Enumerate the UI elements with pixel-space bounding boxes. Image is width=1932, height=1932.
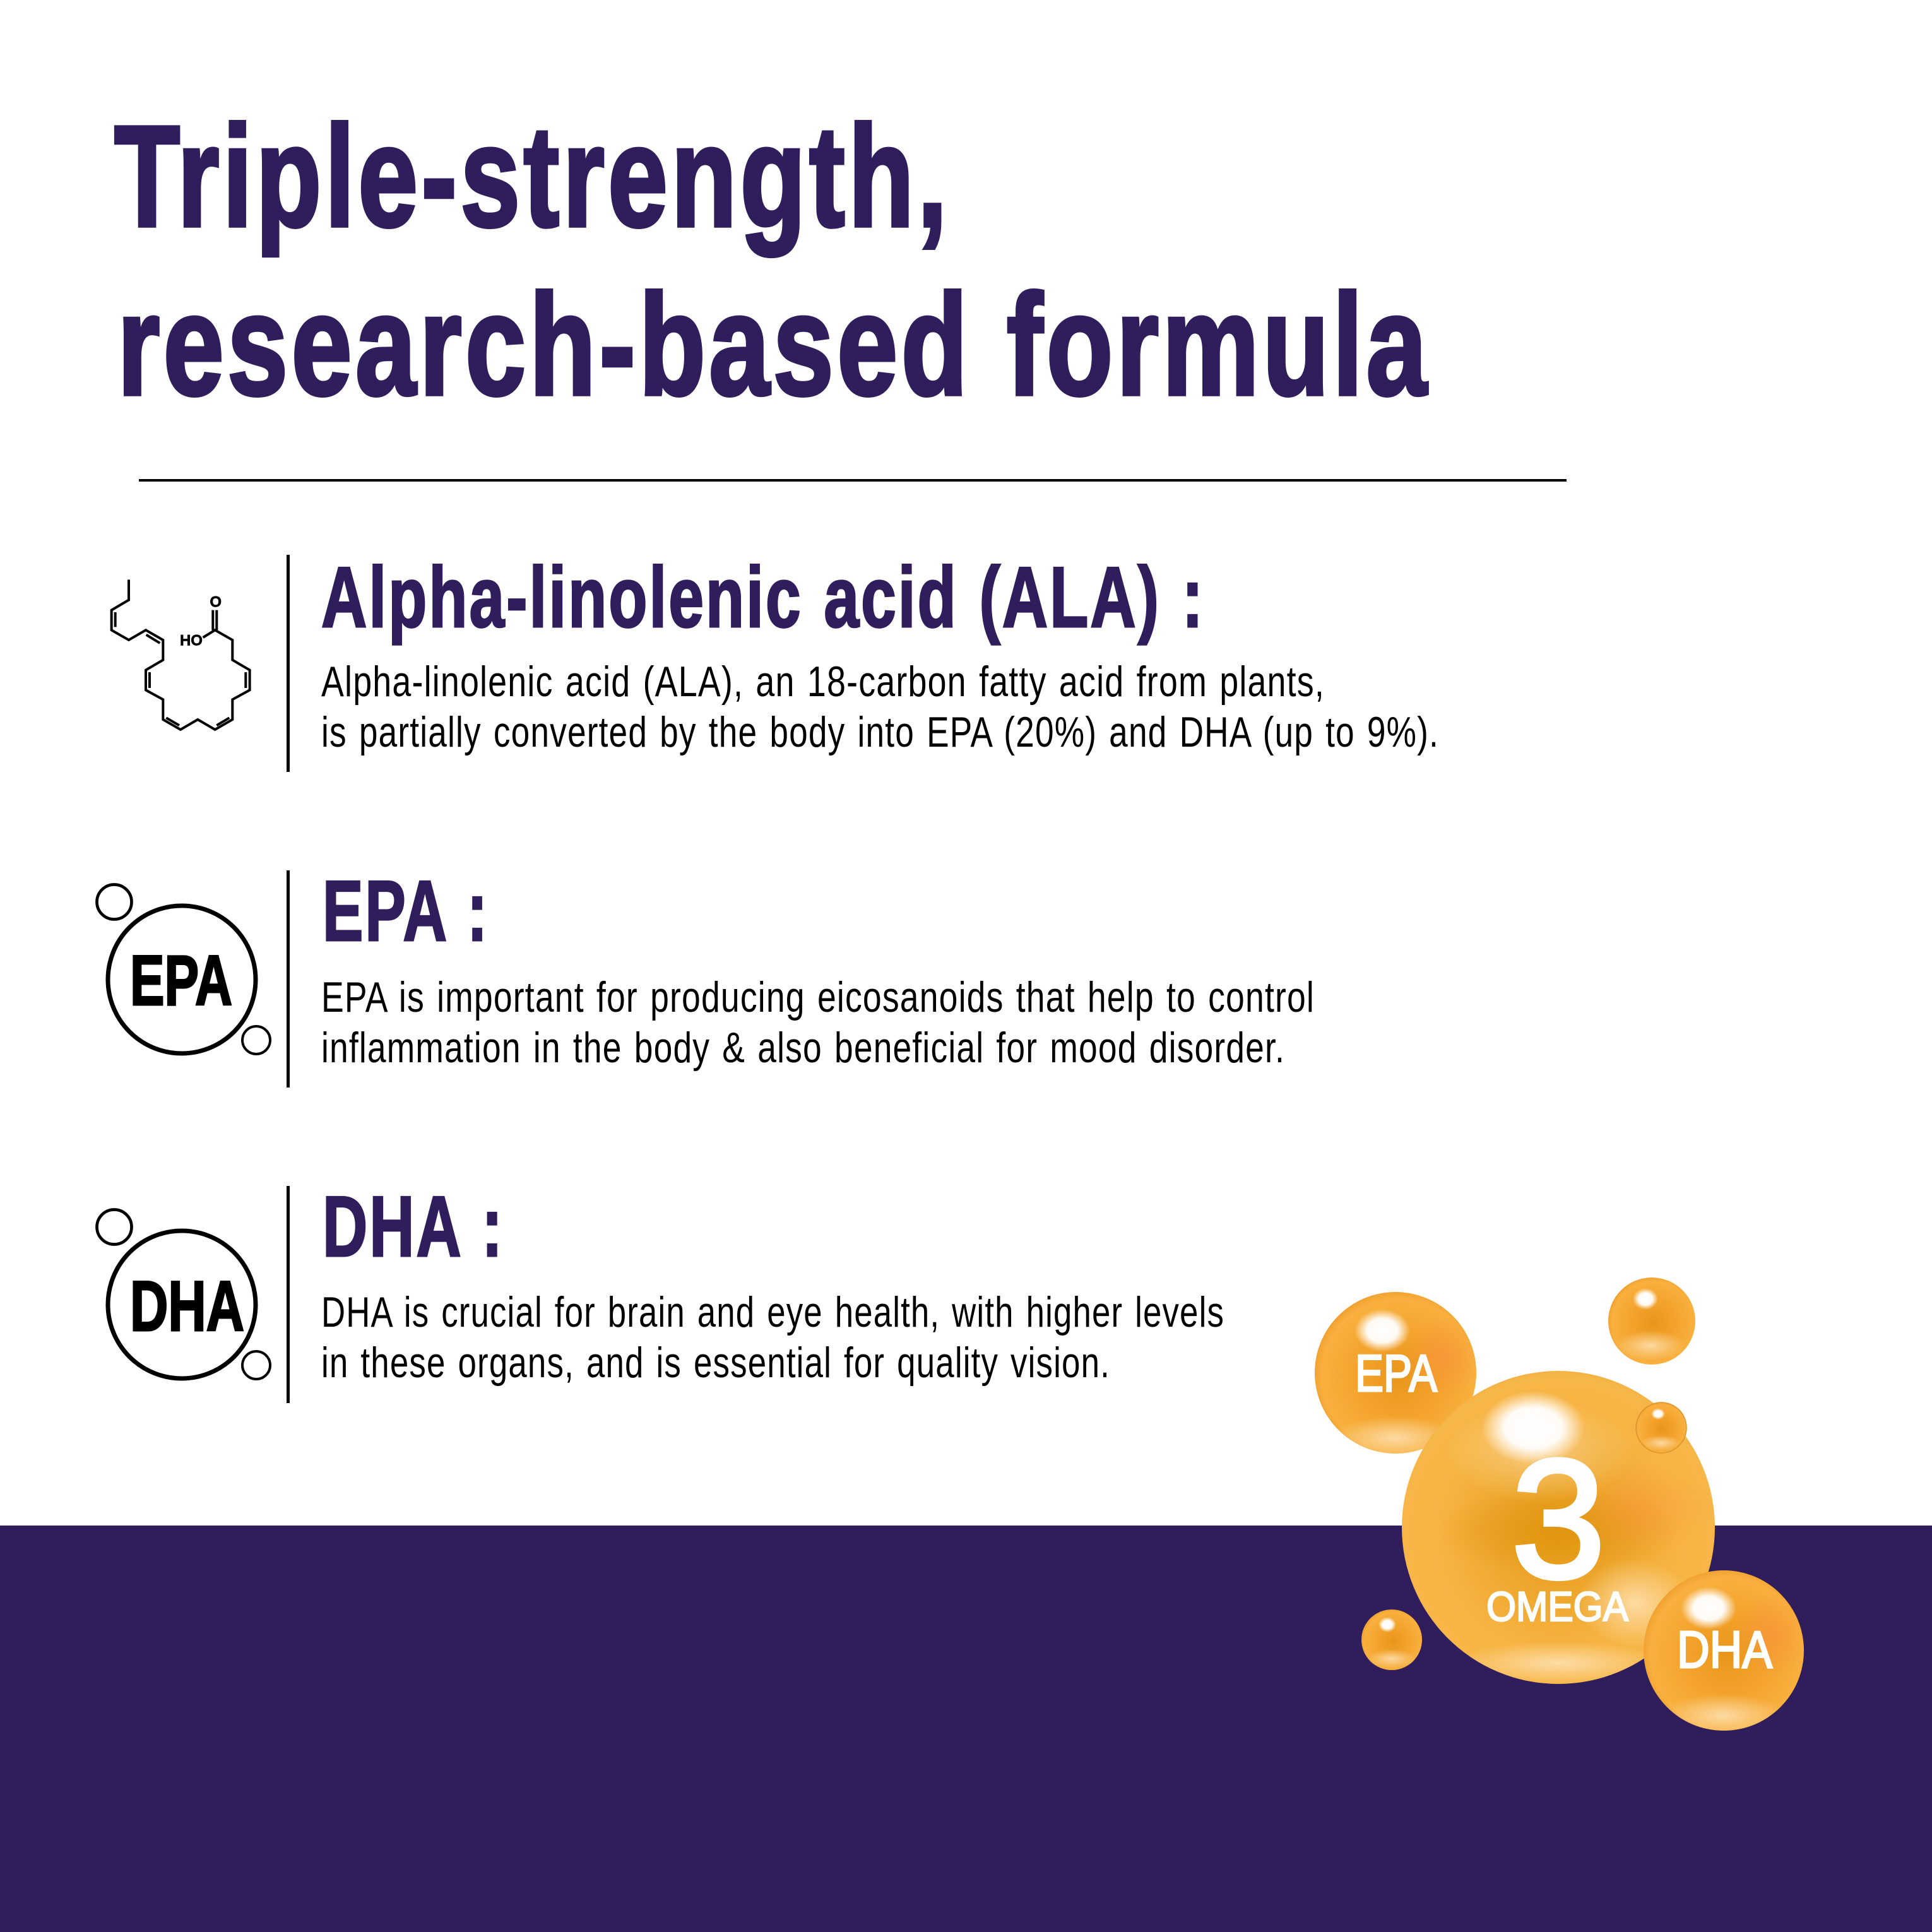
ALA heading: Alpha-linolenic acid (ALA) : xyxy=(321,549,1205,645)
bubble: EPA xyxy=(1315,1292,1480,1459)
panel: DHA xyxy=(97,1178,1224,1403)
icon: ALA molecule xyxy=(112,579,250,730)
number 3: 3 xyxy=(1511,1424,1606,1613)
panel: EPA xyxy=(97,863,1315,1087)
divider line xyxy=(139,479,1567,482)
title: Triple-strength, xyxy=(114,97,951,257)
bubble: DHA xyxy=(1644,1570,1808,1737)
EPA body text: EPA is important for producing eicosanoids that help to control xyxy=(321,973,1315,1021)
EPA vertical rule xyxy=(287,870,290,1087)
EPA body text xyxy=(321,973,1315,1072)
ALA vertical rule xyxy=(287,555,290,772)
DHA heading: DHA : xyxy=(323,1178,504,1274)
icon: ALA molecule: HO xyxy=(180,632,203,649)
panel: ALA xyxy=(112,549,1439,772)
title xyxy=(114,97,1430,425)
bubble: small top right xyxy=(1608,1277,1695,1365)
bubble: EPA: EPA xyxy=(1355,1344,1438,1402)
omega-3 bubble cluster xyxy=(1315,1277,1808,1737)
ALA body text: Alpha-linolenic acid (ALA), an 18-carbon fatty acid from plants, xyxy=(321,658,1325,706)
bubble: main omega 3 xyxy=(1402,1371,1715,1685)
EPA heading: EPA : xyxy=(323,863,489,959)
icon: ALA molecule: O xyxy=(210,594,222,611)
bubble: small on main xyxy=(1636,1402,1686,1453)
OMEGA label: OMEGA xyxy=(1486,1583,1628,1630)
ALA body text xyxy=(321,658,1439,756)
DHA body text xyxy=(321,1288,1224,1387)
DHA body text: DHA is crucial for brain and eye health, with higher levels xyxy=(321,1288,1224,1336)
DHA vertical rule xyxy=(287,1186,290,1403)
ALA body text: is partially converted by the body into EPA (20%) and DHA (up to 9%). xyxy=(321,708,1439,756)
icon: DHA circle xyxy=(97,1209,270,1379)
EPA body text: inflammation in the body & also beneficial for mood disorder. xyxy=(321,1024,1285,1072)
icon: EPA circle: EPA xyxy=(130,941,232,1020)
bottom purple band xyxy=(0,1526,1932,1932)
icon: DHA circle: DHA xyxy=(130,1267,244,1346)
icon: EPA circle xyxy=(97,885,270,1054)
bubble: small bottom left xyxy=(1361,1609,1422,1670)
title: research-based formula xyxy=(117,265,1430,425)
DHA body text: in these organs, and is essential for quality vision. xyxy=(321,1339,1110,1387)
bubble: DHA: DHA xyxy=(1677,1620,1773,1679)
